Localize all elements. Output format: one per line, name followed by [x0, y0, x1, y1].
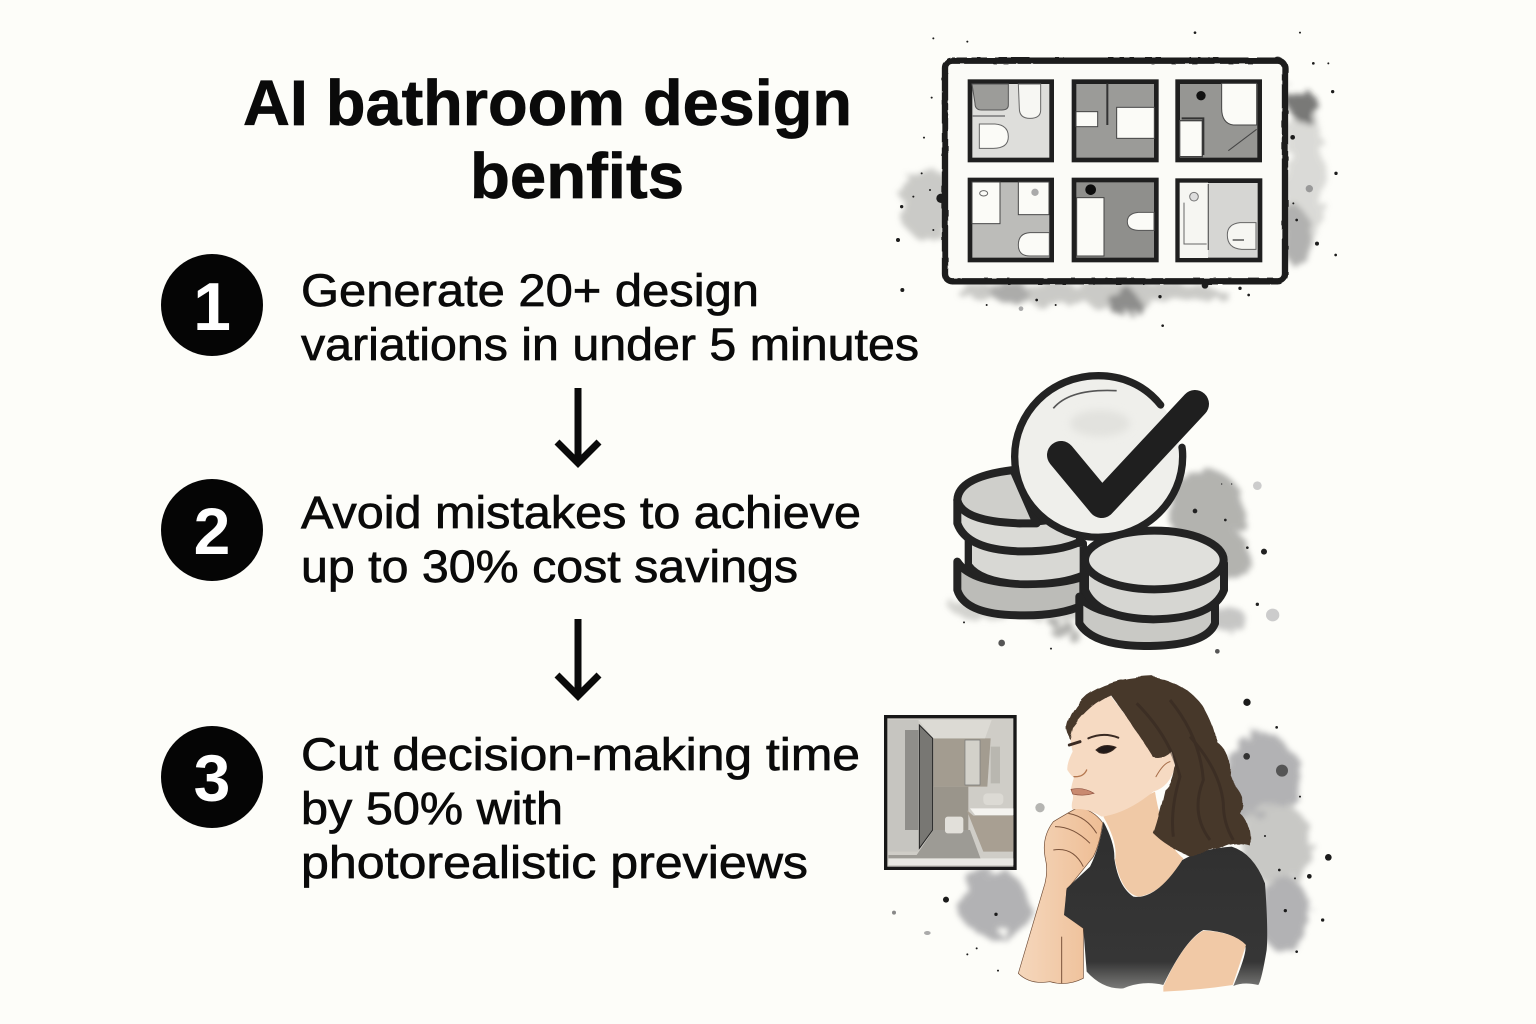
step 2 text: Avoid mistakes to achieve: [301, 487, 861, 538]
plan tile 1: [970, 82, 1052, 160]
plan tile 6: [1178, 181, 1260, 260]
icon: tablet with floor plan variations: [896, 31, 1338, 327]
title: benfits: [470, 140, 684, 212]
facial features: [1069, 735, 1170, 795]
icon: coins with check mark: [950, 375, 1279, 654]
step 3: [161, 726, 860, 888]
step 1 text: variations in under 5 minutes: [301, 319, 919, 370]
step 1 text: Generate 20+ design: [301, 265, 759, 316]
face: [1067, 695, 1175, 817]
plan tile 4: [970, 180, 1052, 260]
number badge 1: [161, 254, 263, 356]
shirt: [1064, 822, 1267, 988]
splatter dots: [892, 699, 1332, 972]
plan tile 3: [1178, 82, 1260, 160]
left coin stack: [957, 470, 1083, 615]
neck: [1103, 792, 1183, 897]
plan tile 5: [1074, 180, 1156, 260]
bathroom preview frame: [886, 717, 1015, 868]
step 3 text: by 50% with: [301, 783, 563, 834]
step 3 text: [301, 729, 860, 888]
arrow 1 to 2: [557, 388, 599, 463]
hair strands: [1137, 700, 1233, 840]
number badge 3: 3: [194, 741, 230, 815]
step 2: [161, 479, 861, 592]
step 3 text: Cut decision-making time: [301, 729, 860, 780]
plan tile 2: [1074, 82, 1156, 160]
ink wash behind coins: [950, 468, 1250, 638]
number badge 3: [161, 726, 263, 828]
hair: [1067, 677, 1250, 855]
check mark: [1061, 404, 1195, 504]
splatter dots: [896, 31, 1338, 327]
ink splash behind tablet: [900, 88, 1325, 315]
illustration: thoughtful woman with bathroom preview: [886, 677, 1332, 992]
step 2 text: [301, 487, 861, 592]
number badge 2: [161, 479, 263, 581]
number badge 2: 2: [194, 494, 230, 568]
check coin: [1015, 375, 1183, 538]
ink wash behind woman: [960, 733, 1312, 950]
right coin stack: [1079, 531, 1224, 646]
number badge 1: 1: [193, 269, 231, 345]
title: AI bathroom design: [243, 67, 852, 139]
woman's left arm and hand: [1018, 807, 1103, 984]
step 2 text: up to 30% cost savings: [301, 541, 798, 592]
arrow 2 to 3: [557, 619, 599, 696]
step 1: [161, 254, 919, 370]
right arm: [1163, 931, 1246, 992]
finger lines: [1053, 813, 1097, 983]
step 3 text: photorealistic previews: [301, 837, 808, 888]
splatter dots: [963, 481, 1279, 654]
tablet body: [945, 61, 1285, 281]
title: [243, 67, 852, 212]
step 1 text: [301, 265, 919, 370]
